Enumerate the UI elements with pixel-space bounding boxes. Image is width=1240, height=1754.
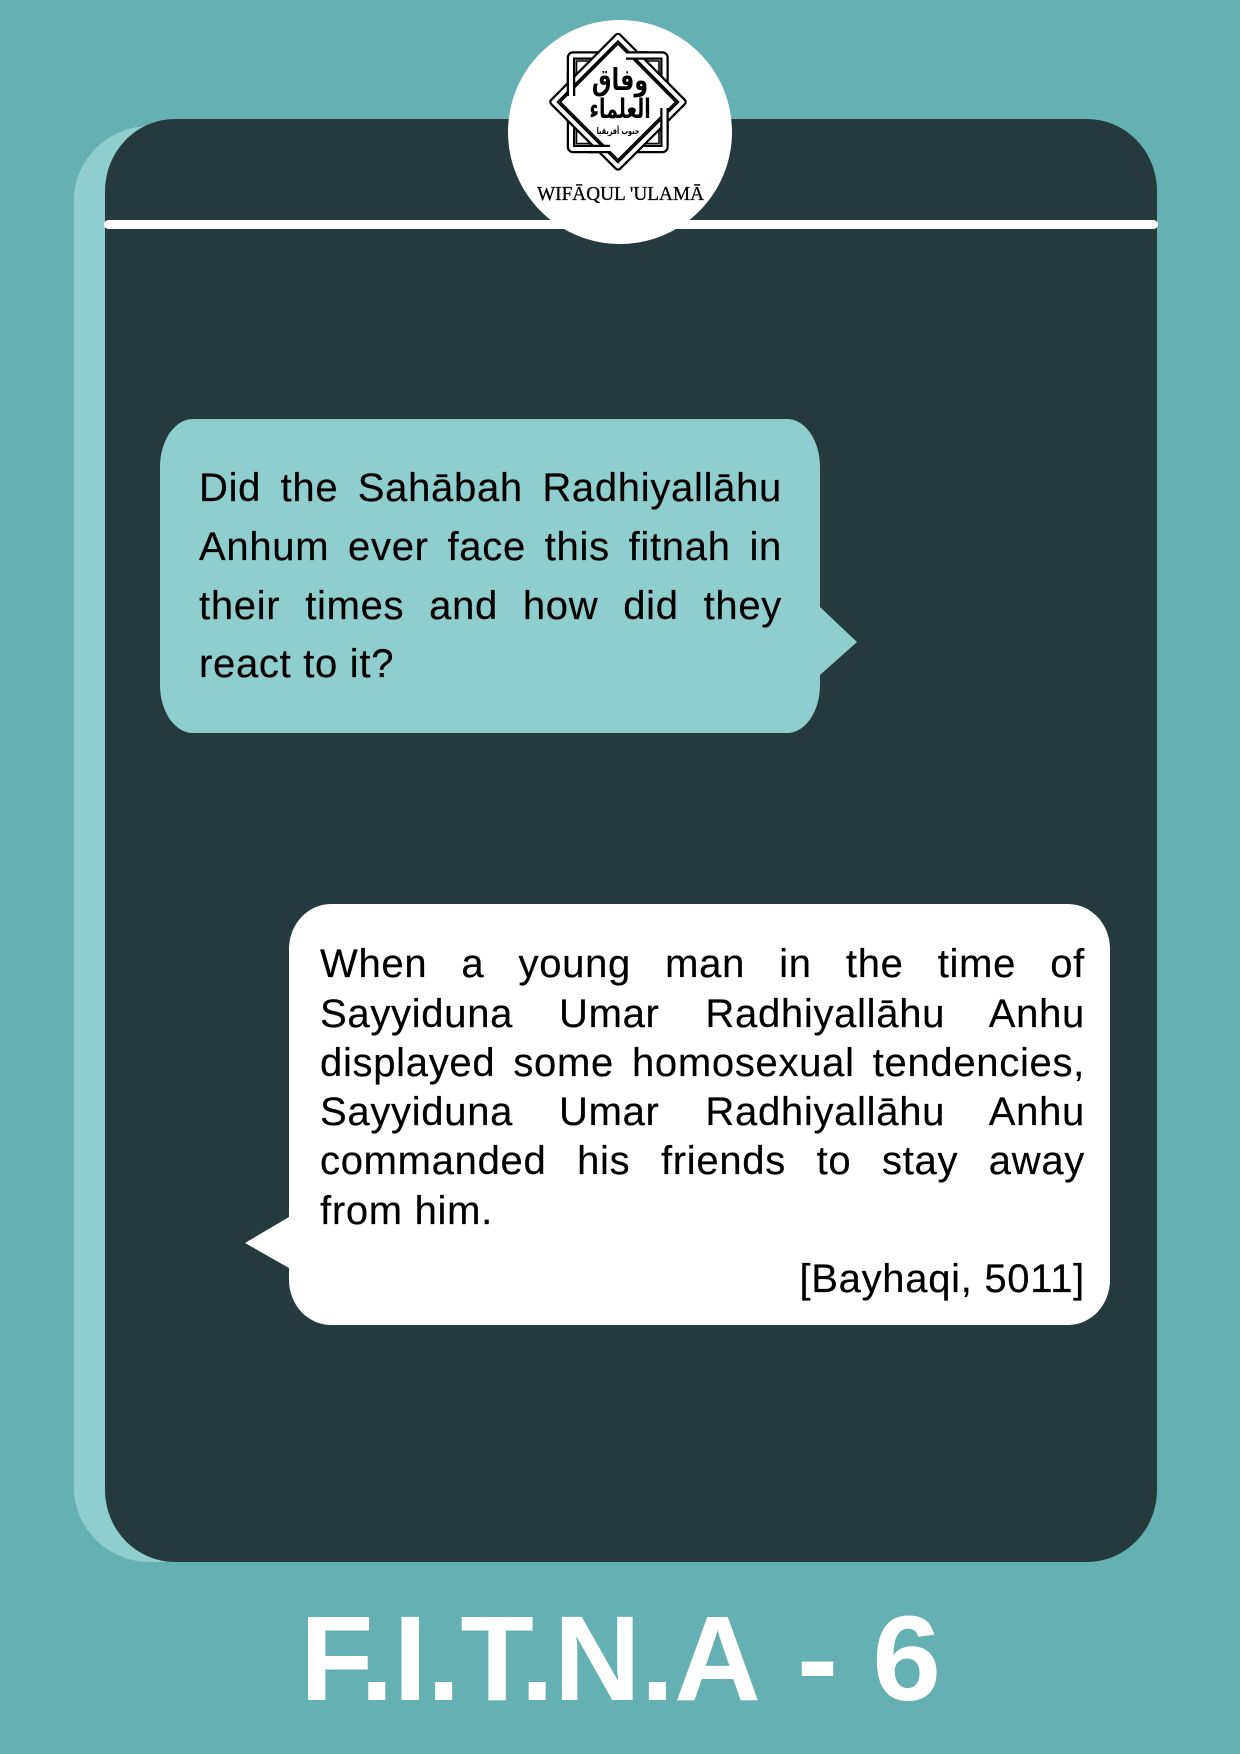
white divider bar bbox=[104, 220, 1158, 229]
question speech bubble: Anhum ever face this fitnah in bbox=[199, 524, 782, 568]
citation: [Bayhaqi, 5011] bbox=[799, 1257, 1085, 1301]
panel: main dark card bbox=[105, 118, 1157, 1562]
answer speech bubble: commanded his friends to stay away bbox=[320, 1139, 1085, 1183]
question speech bubble bbox=[160, 419, 857, 733]
logo: Wifaqul Ulama badge: العلماء bbox=[589, 92, 651, 125]
answer speech bubble bbox=[245, 904, 1110, 1325]
question speech bubble: react to it? bbox=[199, 642, 394, 686]
answer speech bubble: displayed some homosexual tendencies, bbox=[320, 1041, 1085, 1085]
logo: Wifaqul Ulama badge: WIFĀQUL 'ULAMĀ bbox=[537, 183, 705, 205]
question speech bubble: their times and how did they bbox=[199, 584, 782, 628]
answer speech bubble: Sayyiduna Umar Radhiyallāhu Anhu bbox=[320, 992, 1085, 1036]
logo: Wifaqul Ulama badge: وفاق bbox=[592, 64, 648, 98]
question speech bubble: Did the Sahābah Radhiyallāhu bbox=[199, 466, 782, 510]
answer speech bubble: When a young man in the time of bbox=[320, 942, 1085, 986]
logo: Wifaqul Ulama badge bbox=[508, 20, 732, 244]
answer speech bubble: from him. bbox=[320, 1189, 493, 1233]
logo: Wifaqul Ulama badge: جنوب أفريقيا bbox=[597, 125, 639, 136]
panel: light accent card behind main panel bbox=[74, 126, 234, 1562]
answer speech bubble: Sayyiduna Umar Radhiyallāhu Anhu bbox=[320, 1090, 1085, 1134]
